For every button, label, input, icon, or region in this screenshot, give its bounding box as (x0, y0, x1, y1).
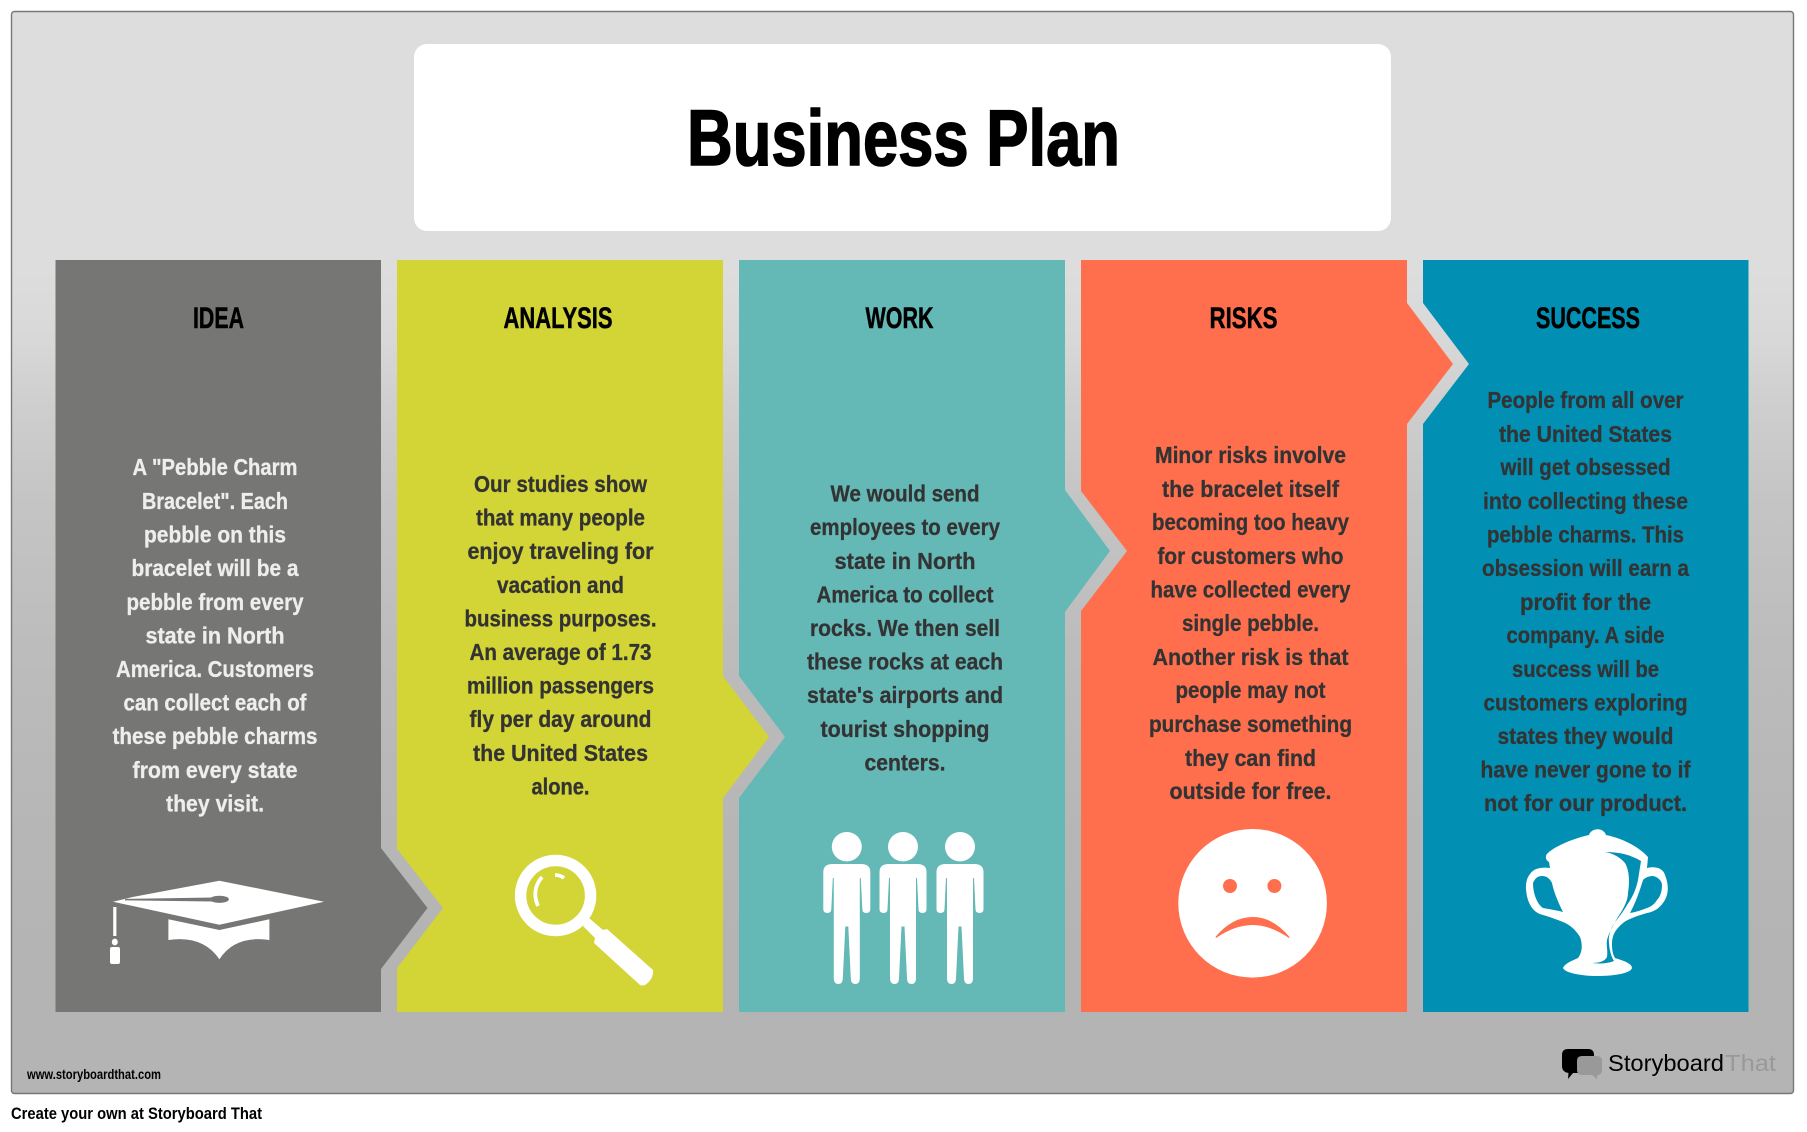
body text: success: not for our product. (1484, 790, 1687, 816)
body text: idea: A "Pebble Charm (132, 454, 298, 480)
body text: risks: Minor risks involve (1155, 442, 1346, 468)
heading: success: SUCCESS (1536, 302, 1640, 335)
body text: risks: have collected every (1150, 576, 1350, 602)
body text: work: these rocks at each (807, 648, 1003, 674)
success arrow shape (1423, 260, 1748, 1012)
body text: idea (112, 454, 318, 816)
body text: success: pebble charms. This (1487, 522, 1684, 548)
body text: success: success will be (1512, 656, 1659, 682)
body text: success: obsession will earn a (1482, 555, 1690, 581)
body text: success: will get obsessed (1500, 454, 1670, 480)
heading: risks: RISKS (1210, 302, 1278, 335)
title: Business Plan (687, 93, 1120, 182)
footer credit: Create your own at Storyboard That (11, 1105, 262, 1123)
body text: analysis (464, 471, 656, 799)
body text: idea: from every state (132, 757, 298, 783)
body text: risks: outside for free. (1170, 778, 1332, 804)
body text: work (807, 480, 1003, 775)
icon: magnifying glass (521, 860, 653, 986)
body text: analysis: Our studies show (474, 471, 648, 497)
body text: work: rocks. We then sell (810, 615, 1000, 641)
body text: risks: for customers who (1158, 543, 1344, 569)
body text: success: into collecting these (1483, 488, 1688, 514)
work arrow shape (739, 260, 1110, 1012)
logo: Storyboard That (1562, 1049, 1777, 1079)
body text: risks (1149, 442, 1352, 804)
body text: risks: single pebble. (1182, 610, 1319, 636)
heading: work: WORK (866, 302, 934, 335)
logo: Storyboard That: That (1725, 1050, 1777, 1076)
body text: success: customers exploring (1484, 689, 1688, 715)
idea arrow shape (56, 260, 428, 1012)
icon: graduation cap (110, 881, 324, 964)
body text: work: employees to every (810, 514, 1000, 540)
body text: success: company. A side (1506, 622, 1664, 648)
body text: success (1480, 387, 1691, 816)
website url: www.storyboardthat.com (26, 1067, 161, 1082)
body text: risks: people may not (1176, 677, 1326, 703)
body text: idea: America. Customers (116, 656, 314, 682)
body text: idea: can collect each of (124, 690, 307, 716)
icon: sad face (1178, 829, 1327, 978)
body text: success: People from all over (1488, 387, 1684, 413)
body text: idea: state in North (146, 622, 284, 648)
body text: idea: bracelet will be a (132, 555, 299, 581)
body text: success: states they would (1498, 723, 1674, 749)
icon: three people (823, 832, 984, 984)
logo wordmark: Storyboard (1608, 1050, 1724, 1076)
icon: speech bubbles (1562, 1049, 1602, 1079)
analysis arrow shape (397, 260, 769, 1012)
body text: work: tourist shopping (820, 716, 990, 742)
panel: success (1423, 260, 1748, 1012)
body text: work: state in North (834, 548, 976, 574)
body text: risks: Another risk is that (1152, 644, 1349, 670)
body text: risks: they can find (1185, 745, 1316, 771)
body text: analysis: the United States (473, 740, 648, 766)
body text: analysis: vacation and (497, 572, 624, 598)
body text: work: centers. (864, 749, 946, 775)
panel: risks (1081, 260, 1453, 1012)
body text: risks: the bracelet itself (1162, 476, 1339, 502)
body text: analysis: million passengers (467, 673, 654, 699)
heading: analysis: ANALYSIS (504, 302, 612, 335)
body text: analysis: fly per day around (470, 706, 652, 732)
body text: idea: pebble on this (144, 522, 286, 548)
title panel (414, 44, 1391, 231)
panel: work (739, 260, 1110, 1012)
body text: success: the United States (1499, 421, 1672, 447)
body text: idea: pebble from every (126, 589, 304, 615)
icon: trophy (1526, 829, 1668, 976)
body text: risks: becoming too heavy (1152, 509, 1349, 535)
risks arrow shape (1081, 260, 1453, 1012)
body text: success: have never gone to if (1480, 757, 1691, 783)
body text: risks: purchase something (1149, 711, 1352, 737)
body text: analysis: that many people (476, 505, 645, 531)
body text: success: profit for the (1520, 589, 1651, 615)
body text: analysis: enjoy traveling for (468, 538, 654, 564)
heading: idea: IDEA (193, 302, 244, 335)
body text: analysis: business purposes. (464, 605, 656, 631)
body text: work: We would send (830, 480, 980, 506)
panel: analysis (397, 260, 769, 1012)
body text: idea: they visit. (166, 790, 264, 816)
panel: idea (56, 260, 428, 1012)
body text: analysis: alone. (532, 773, 590, 799)
body text: work: America to collect (816, 581, 994, 607)
body text: analysis: An average of 1.73 (470, 639, 652, 665)
body text: idea: these pebble charms (112, 723, 318, 749)
body text: idea: Bracelet". Each (142, 488, 288, 514)
body text: work: state's airports and (807, 682, 1003, 708)
